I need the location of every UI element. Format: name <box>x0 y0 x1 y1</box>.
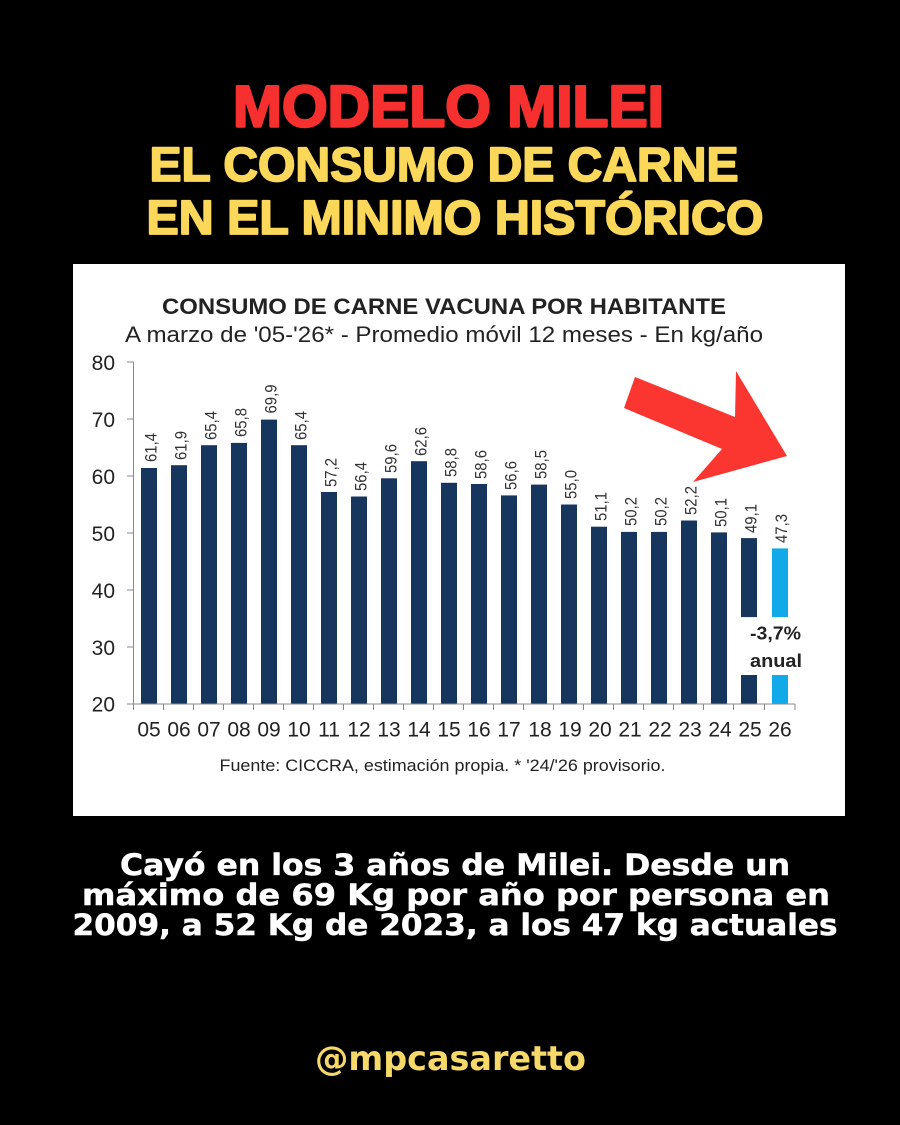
x axis year labels: 14 <box>407 718 431 742</box>
value labels: 50,1 <box>712 498 730 527</box>
value labels: 58,6 <box>472 450 490 479</box>
y axis with labels: 50 <box>92 523 115 546</box>
value labels: 50,2 <box>652 497 670 526</box>
panel: chart card <box>73 264 845 816</box>
x axis year labels: 07 <box>197 718 221 742</box>
value labels: 65,4 <box>292 411 310 440</box>
explanation line 3: 2009, a 52 Kg de 2023, a los 47 kg actuales <box>72 908 837 942</box>
x axis year labels: 13 <box>377 718 401 742</box>
x axis year labels: 12 <box>347 718 371 742</box>
value labels: 58,5 <box>532 450 550 479</box>
x axis year labels: 16 <box>467 718 491 742</box>
value labels: 55,0 <box>562 470 580 499</box>
value labels: 51,1 <box>592 492 610 521</box>
value labels: 49,1 <box>742 504 760 533</box>
x axis year labels: 26 <box>768 718 792 742</box>
chart subtitle: A marzo de '05-'26* - Promedio móvil 12 meses - En kg/año <box>125 322 763 347</box>
x axis year labels: 21 <box>618 718 642 742</box>
explanation line 2: máximo de 69 Kg por año por persona en <box>82 878 830 912</box>
x axis year labels: 05 <box>137 718 161 742</box>
value labels: 65,4 <box>202 411 220 440</box>
bar chart <box>141 420 788 704</box>
x axis year labels: 09 <box>257 718 281 742</box>
value labels: 61,4 <box>142 433 160 462</box>
x axis year labels: 10 <box>287 718 311 742</box>
callout: annual change: anual <box>750 651 802 671</box>
handle: @mpcasaretto <box>315 1039 586 1079</box>
y axis with labels: 20 <box>92 694 115 716</box>
x axis line and ticks <box>133 704 795 710</box>
y axis with labels: 30 <box>92 637 115 660</box>
value labels: 47,3 <box>772 514 791 543</box>
x axis year labels: 11 <box>318 718 340 742</box>
value labels: 52,2 <box>682 486 700 515</box>
x axis year labels: 23 <box>678 718 702 742</box>
value labels: 56,6 <box>502 461 520 490</box>
value labels: 50,2 <box>622 497 640 526</box>
value labels: 65,8 <box>232 408 250 437</box>
value labels: 58,8 <box>442 448 460 477</box>
x axis year labels <box>137 718 792 742</box>
chart title: CONSUMO DE CARNE VACUNA POR HABITANTE <box>162 294 726 319</box>
source note: Fuente: CICCRA, estimación propia. * '24/'26 provisorio. <box>220 757 666 775</box>
x axis year labels: 20 <box>588 718 612 742</box>
y axis with labels: 60 <box>92 466 115 489</box>
x axis year labels: 18 <box>528 718 552 742</box>
y axis with labels <box>92 352 134 716</box>
x axis year labels: 24 <box>708 718 732 742</box>
value labels <box>142 384 791 543</box>
callout: annual change <box>750 624 802 671</box>
arrow: red pointing to last bar <box>624 371 787 482</box>
value labels: 69,9 <box>262 384 280 414</box>
value labels: 62,6 <box>412 427 430 456</box>
x axis year labels: 25 <box>738 718 762 742</box>
x axis year labels: 06 <box>167 718 191 742</box>
y axis with labels: 40 <box>92 580 115 603</box>
text block: explanation <box>72 848 837 942</box>
callout: annual change: -3,7% <box>750 624 801 644</box>
x axis year labels: 22 <box>648 718 672 742</box>
y axis with labels: 80 <box>92 352 115 375</box>
heading: modelo milei: MODELO MILEI <box>233 74 664 140</box>
explanation line 1: Cayó en los 3 años de Milei. Desde un <box>120 848 790 882</box>
y axis with labels: 70 <box>92 409 115 432</box>
value labels: 56,4 <box>352 462 370 491</box>
value labels: 59,6 <box>382 444 400 473</box>
x axis year labels: 15 <box>437 718 461 742</box>
x axis year labels: 17 <box>497 718 521 742</box>
value labels: 61,9 <box>172 431 190 460</box>
heading: el consumo de carne: EL CONSUMO DE CARNE <box>150 139 738 192</box>
x axis year labels: 08 <box>227 718 251 742</box>
title block <box>146 74 764 245</box>
heading: en el minimo historico: EN EL MINIMO HISTÓRICO <box>146 190 764 245</box>
value labels: 57,2 <box>322 458 340 487</box>
x axis year labels: 19 <box>558 718 582 742</box>
